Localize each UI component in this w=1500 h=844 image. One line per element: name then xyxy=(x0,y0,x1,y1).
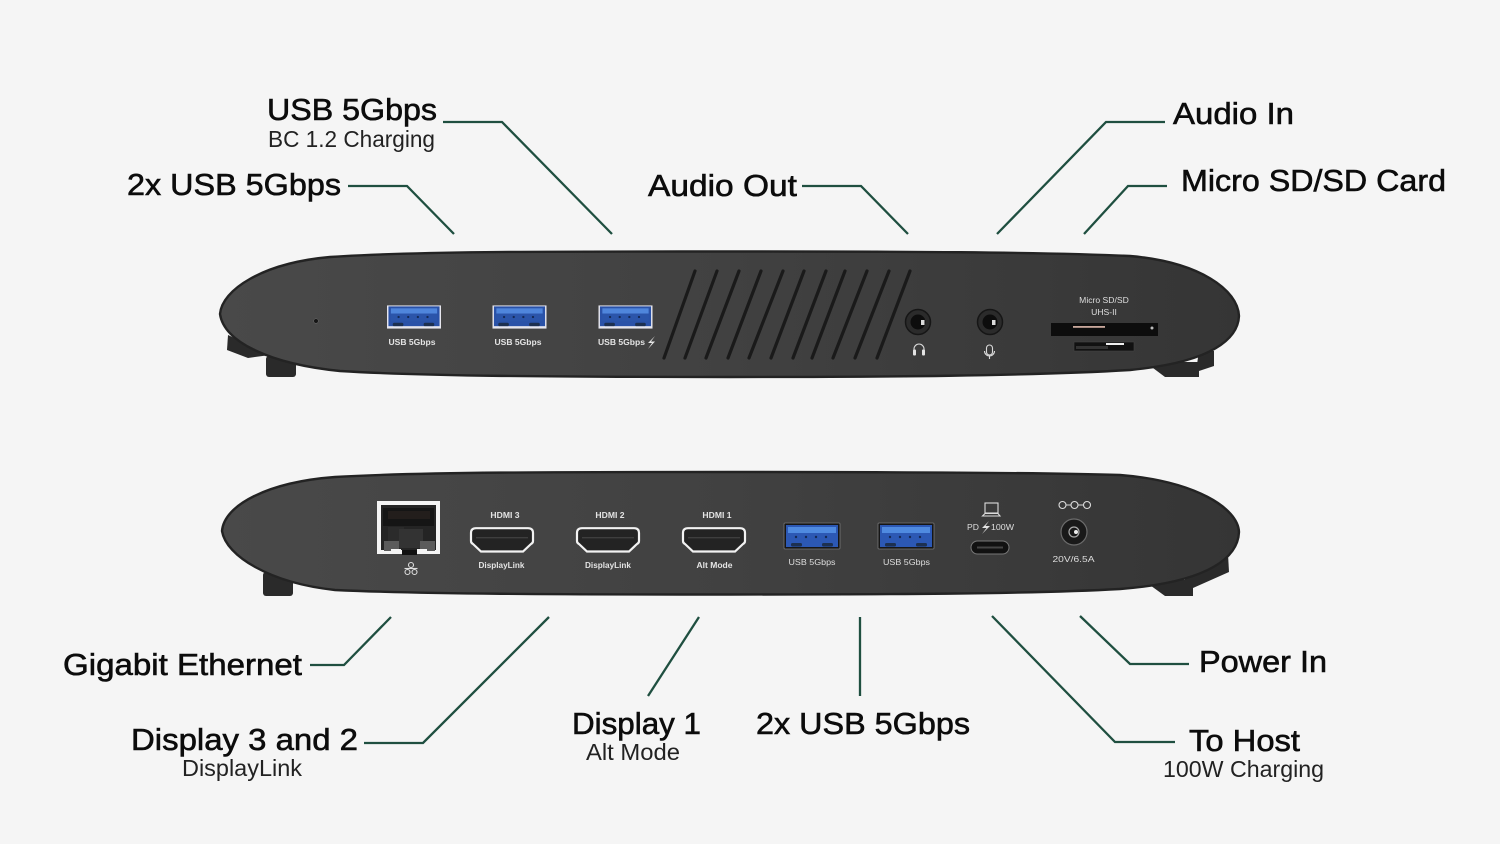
label: Gigabit Ethernet: Gigabit Ethernet xyxy=(63,647,302,682)
USB ports: USB 5Gbps xyxy=(494,337,542,347)
USB ports xyxy=(387,305,655,349)
label: Power In: Power In xyxy=(1199,644,1327,679)
rear USB ports: USB 5Gbps xyxy=(883,557,930,567)
rear USB ports: USB 5Gbps xyxy=(788,557,836,567)
HDMI ports: DisplayLink xyxy=(585,560,631,570)
label: Display 3 and 2 DisplayLink: Display 3 and 2 xyxy=(131,722,358,757)
label: USB 5Gbps BC 1.2 Charging: BC 1.2 Charging xyxy=(268,126,435,152)
label: 2x USB 5Gbps front: 2x USB 5Gbps xyxy=(127,167,341,202)
feet xyxy=(227,335,1214,377)
label: Display 1 Alt Mode: Alt Mode xyxy=(586,739,680,765)
audio out jack xyxy=(906,310,930,356)
label: Display 3 and 2 DisplayLink: DisplayLink xyxy=(182,755,303,781)
USB-C host port: PD xyxy=(967,522,979,532)
label: Audio In: Audio In xyxy=(1173,96,1294,131)
HDMI ports: Alt Mode xyxy=(696,560,733,570)
panel: rear of dock xyxy=(222,472,1239,596)
card slots: Micro SD/SD xyxy=(1079,295,1129,305)
HDMI ports: DisplayLink xyxy=(478,560,525,570)
ethernet port xyxy=(379,503,438,574)
label: Display 1 Alt Mode: Display 1 xyxy=(572,706,701,741)
leader lines xyxy=(310,122,1189,743)
label: To Host 100W Charging: To Host xyxy=(1189,723,1300,758)
indicator light xyxy=(314,319,318,323)
ventilation slots xyxy=(664,271,910,358)
USB-C host port: 100W xyxy=(991,522,1015,532)
HDMI ports: HDMI 2 xyxy=(595,510,625,520)
label: Display 3 and 2 DisplayLink xyxy=(131,722,358,781)
power jack: 20V/6.5A xyxy=(1052,554,1095,564)
panel: front of dock xyxy=(220,251,1239,377)
device body xyxy=(222,472,1239,594)
feet xyxy=(263,554,1229,596)
card slots: UHS-II xyxy=(1091,307,1117,317)
label: Micro SD/SD Card: Micro SD/SD Card xyxy=(1181,163,1446,198)
label: 2x USB 5Gbps rear: 2x USB 5Gbps xyxy=(756,706,970,741)
label: Display 1 Alt Mode xyxy=(572,706,701,765)
audio in jack xyxy=(978,310,1002,359)
device body xyxy=(220,251,1239,377)
USB ports: USB 5Gbps xyxy=(388,337,436,347)
label: To Host 100W Charging: 100W Charging xyxy=(1163,756,1324,782)
network icon xyxy=(404,562,418,574)
label: USB 5Gbps BC 1.2 Charging xyxy=(267,92,437,152)
HDMI ports xyxy=(471,510,745,570)
HDMI ports: HDMI 1 xyxy=(702,510,732,520)
rear USB ports xyxy=(784,523,934,567)
power jack xyxy=(1052,502,1095,564)
USB-C host port xyxy=(967,503,1015,554)
HDMI ports: HDMI 3 xyxy=(490,510,520,520)
card slots xyxy=(1051,295,1158,351)
label: Audio Out: Audio Out xyxy=(648,168,797,203)
label: To Host 100W Charging xyxy=(1163,723,1324,782)
label: USB 5Gbps BC 1.2 Charging: USB 5Gbps xyxy=(267,92,437,127)
USB ports: USB 5Gbps xyxy=(598,337,645,347)
